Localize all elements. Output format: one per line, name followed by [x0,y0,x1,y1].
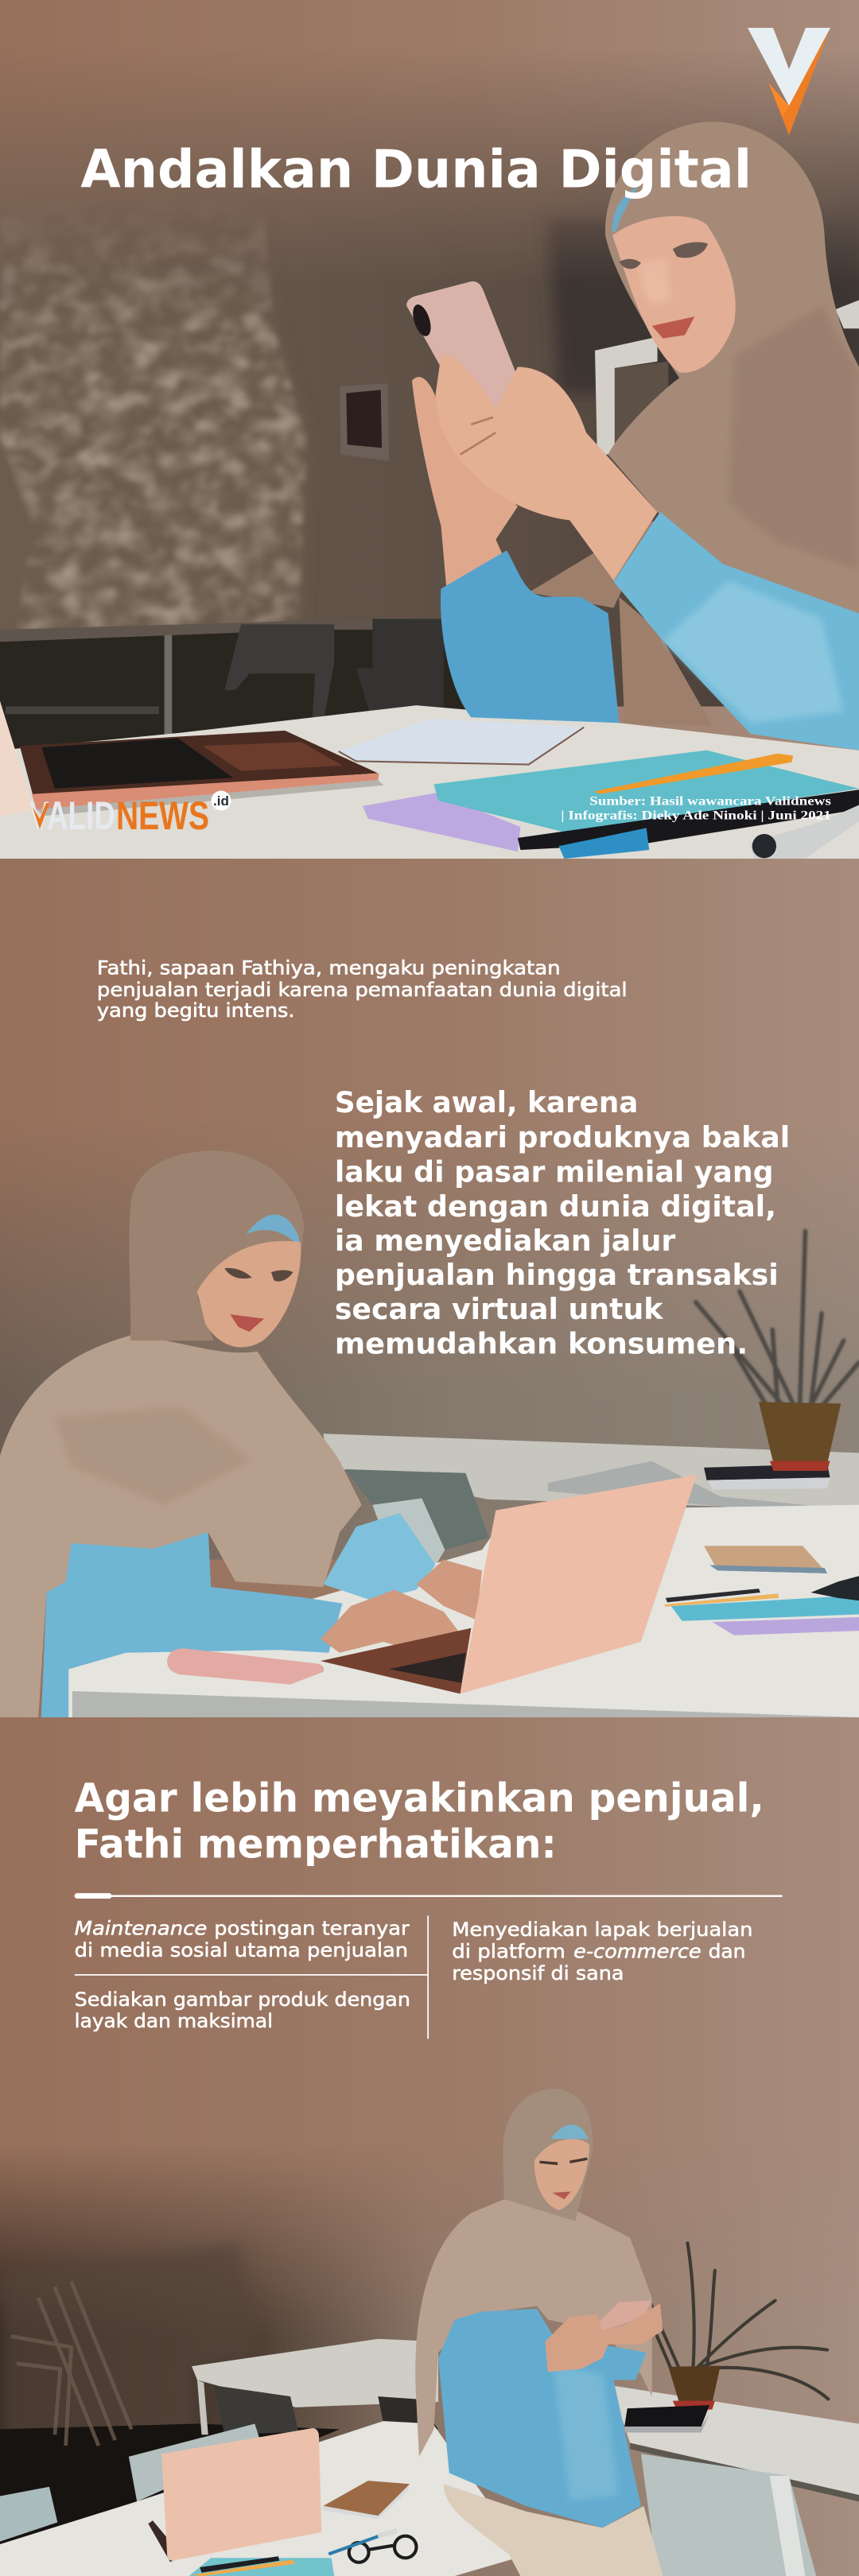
tip: e-commerce: dan [709,1940,745,1962]
tip: e-commerce: responsif di sana [452,1962,624,1984]
woman typing [0,1150,482,1717]
hijab [129,1150,304,1340]
logo: V mark [748,28,830,135]
chairs [0,2424,816,2576]
intro text: Fathi, sapaan Fathiya, mengaku peningkatan [97,956,561,979]
logo: Validnews wordmark [29,790,231,838]
brown notebook [322,2481,410,2519]
tip: product images: layak dan maksimal [75,2010,273,2032]
source credit: Sumber: Hasil wawancara Validnews [589,795,831,809]
shirt [438,2309,647,2528]
face [612,216,736,373]
back table [192,2339,859,2501]
main statement: lekat dengan dunia digital, [335,1189,776,1224]
intro text: penjualan terjadi karena pemanfaatan dunia digital [97,979,628,1001]
back table [323,1433,859,1519]
source credit [561,795,831,822]
section heading: Agar lebih meyakinkan penjual, [75,1774,764,1821]
plant pot [759,1402,841,1471]
photo: wall [0,2144,859,2576]
logo: Validnews wordmark: NEWS [116,793,209,838]
tip: product images [75,1988,410,2032]
tips text [75,1917,752,2032]
main statement: memudahkan konsumen. [335,1327,748,1361]
shawl [0,1335,362,1717]
face [534,2139,589,2210]
laptop [0,701,383,816]
intro text [97,956,628,1022]
front hand and forearm [436,355,658,580]
hands [321,1560,482,1653]
panel background [0,1717,859,2576]
back notebooks [704,1464,830,1489]
dark floor [0,2424,340,2550]
tip: e-commerce: di platform [452,1940,566,1962]
photo: wall [0,1122,859,1560]
section heading [75,1774,764,1867]
front table [0,2421,526,2576]
headband [247,1215,300,1247]
tip: maintenance: Maintenance [75,1917,207,1939]
orange pencil [594,754,793,794]
title: Andalkan Dunia Digital [80,139,752,200]
phone [593,2301,652,2330]
stacked chairs [11,2281,131,2446]
main statement: penjualan hingga transaksi [335,1258,779,1292]
hands [545,2303,663,2372]
tip: product images: Sediakan gambar produk dengan [75,1988,410,2011]
panel: seller tips and closing photo [0,1717,859,2576]
tip: e-commerce: e-commerce [573,1940,702,1962]
main statement: secara virtual untuk [335,1292,663,1326]
source credit: | Infografis: Dieky Ade Ninoki | Juni 2021 [561,809,831,822]
stationery [189,2556,334,2576]
dark lower room with chairs [0,619,466,749]
black notebook [624,2405,709,2433]
glasses and pens [328,2531,416,2562]
photo: wall and room [0,49,859,707]
logo: Validnews wordmark: VALID [29,793,115,838]
panel: intro text and laptop photo [0,859,859,1717]
white shelf [595,300,859,455]
panel: opening photo with title [0,0,859,859]
intro text: yang begitu intens. [97,999,295,1022]
markers [518,789,859,859]
tip: maintenance: di media sosial utama penjualan [75,1939,408,1961]
chair [345,1469,488,1570]
phone [406,281,515,408]
table [0,705,859,859]
headband [550,2124,589,2139]
main statement: ia menyediakan jalur [335,1224,675,1258]
small notebook [704,1546,827,1573]
open notebook [339,719,584,765]
plant [696,1231,859,1406]
front table [68,1505,859,1717]
logo: Validnews wordmark: .id [213,793,229,809]
shawl [415,2199,652,2457]
teal notebook [434,751,859,833]
table edge [72,1691,859,1717]
phone on table [167,1648,324,1685]
tip: maintenance [75,1917,410,1961]
table lines [75,1915,429,2039]
main statement: laku di pasar milenial yang [335,1154,774,1189]
picture frame on wall [340,383,389,461]
stone wall texture [0,180,307,630]
panel background [0,859,859,1717]
plant [633,2243,828,2399]
laptop [150,2428,321,2561]
back hand [412,377,518,588]
stationery [664,1576,859,1635]
face [197,1241,301,1348]
scarf [605,122,859,619]
main statement: Sejak awal, karena [335,1085,638,1119]
main statement [335,1085,790,1361]
shirt [441,550,619,723]
panel background [293,0,859,751]
headband [612,186,638,233]
tip: e-commerce [452,1918,752,1984]
hijab [503,2089,593,2221]
purple notebook [363,793,520,852]
tip: e-commerce: Menyediakan lapak berjualan [452,1918,752,1941]
trousers [444,2484,663,2576]
woman with phone [406,122,859,751]
section heading: Fathi memperhatikan: [75,1820,557,1867]
divider rule [75,1893,783,1899]
brick wall [0,2243,255,2451]
woman sitting [415,2089,663,2576]
tip: maintenance: postingan teranyar [214,1917,410,1939]
laptop [321,1475,697,1693]
plant pot [668,2366,721,2410]
shirt [41,1530,342,1717]
main statement: menyadari produknya bakal [335,1120,790,1154]
